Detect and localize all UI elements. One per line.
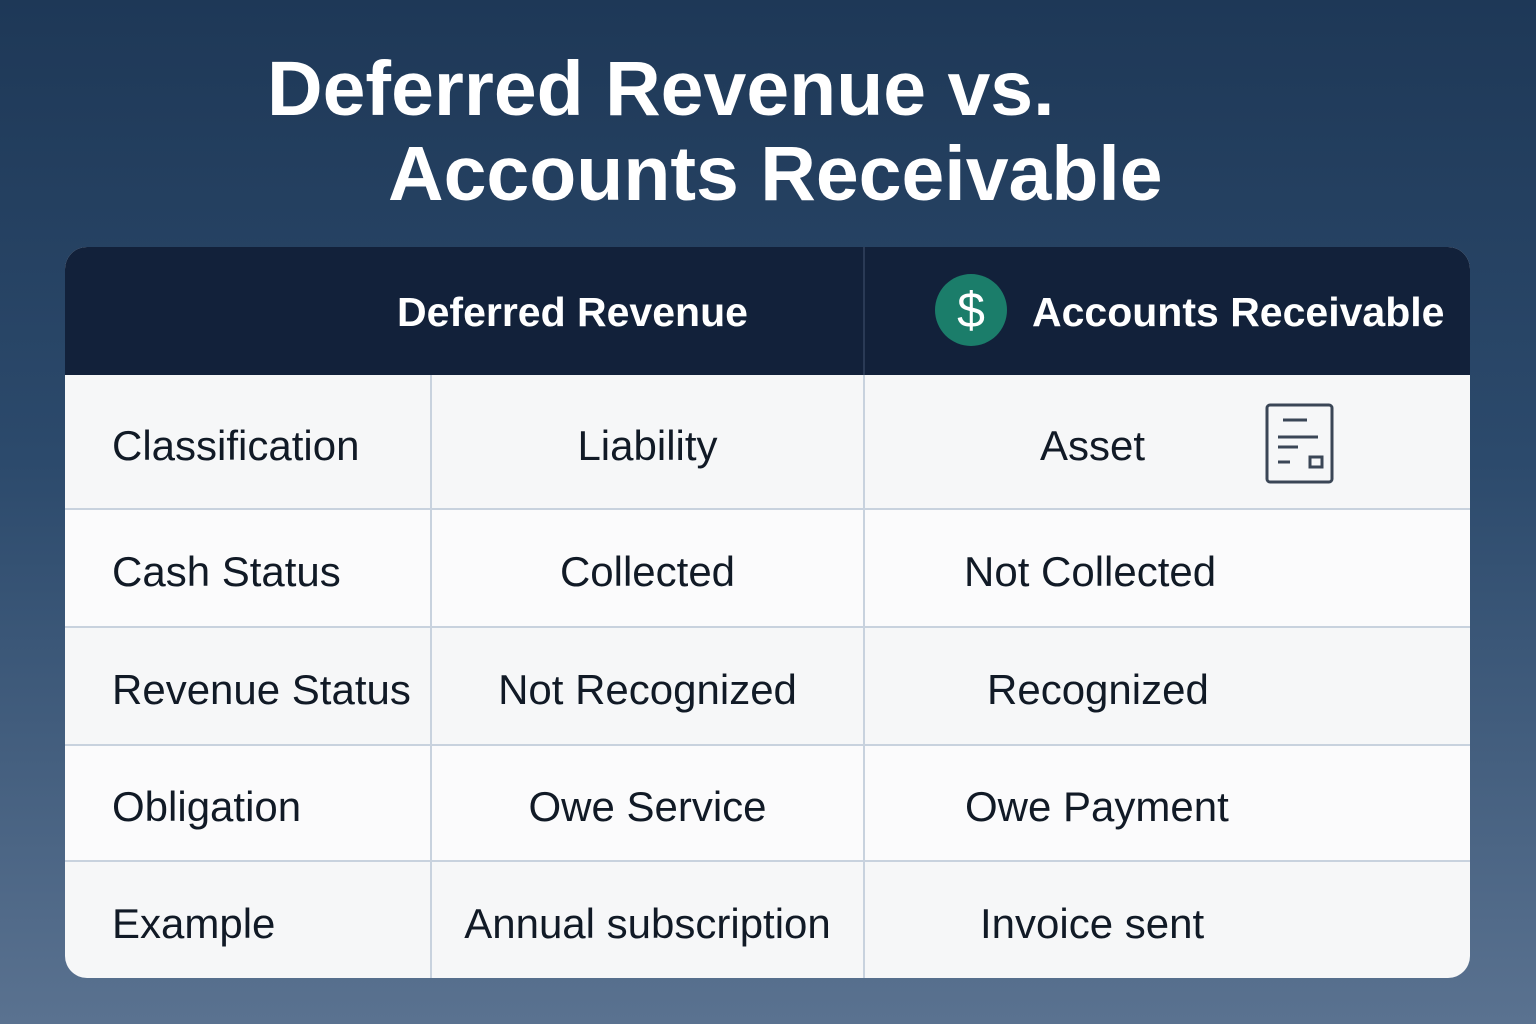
row: revenue status: Revenue Status [112, 666, 411, 713]
title: Deferred Revenue vs. [267, 46, 1054, 132]
row: classification: Classification [112, 422, 359, 468]
row: classification: Liability [577, 422, 718, 468]
row: cash status: Not Collected [964, 548, 1216, 595]
row: cash status: Cash Status [112, 548, 341, 595]
row: obligation: Owe Service [528, 783, 767, 830]
comparison table [65, 247, 1470, 978]
icon: document [1266, 404, 1334, 484]
row: obligation: Owe Payment [965, 783, 1229, 830]
table header: Deferred Revenue [397, 289, 748, 335]
table header: Accounts Receivable [1032, 289, 1444, 335]
row: classification: Asset [1040, 422, 1145, 468]
row: revenue status: Recognized [987, 666, 1209, 713]
row: example: Invoice sent [980, 900, 1204, 947]
row: cash status [65, 508, 1470, 626]
row: cash status: Collected [560, 548, 735, 595]
row: obligation [65, 744, 1470, 860]
row: example: Example [112, 900, 275, 947]
row: classification [112, 404, 1334, 484]
row: revenue status [65, 626, 1470, 744]
row: obligation: Obligation [112, 783, 301, 830]
title: Accounts Receivable [388, 131, 1163, 217]
icon: dollar circle: $ [957, 282, 985, 338]
table header [65, 247, 1470, 375]
row: revenue status: Not Recognized [498, 666, 797, 713]
title [267, 46, 1163, 217]
row: example: Annual subscription [464, 900, 831, 947]
row: example [65, 860, 1470, 978]
icon: dollar circle [935, 274, 1007, 346]
